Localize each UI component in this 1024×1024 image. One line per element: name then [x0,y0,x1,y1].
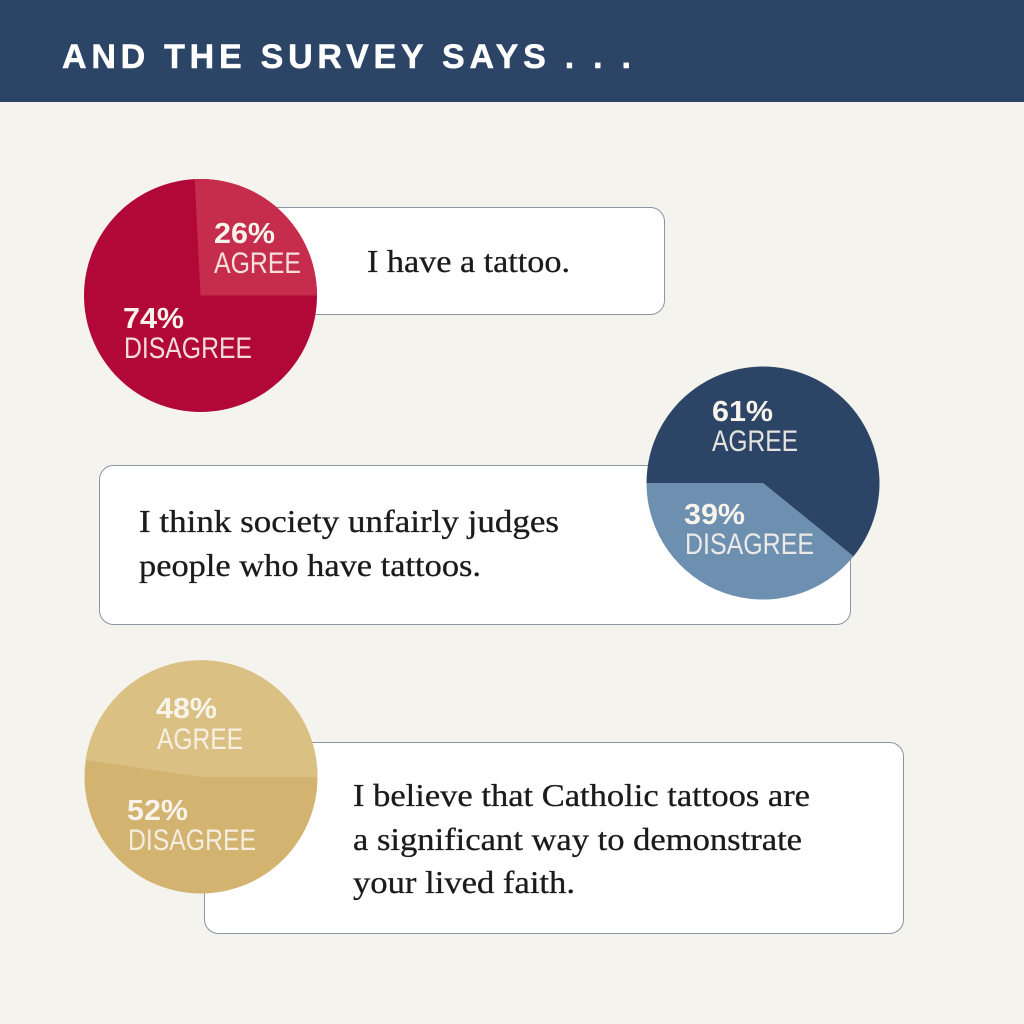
label: 39% disagree [684,499,814,561]
label: 48% agree [156,693,243,756]
label: 48% agree: AGREE [157,723,243,756]
header banner [0,0,1024,102]
label: 26% agree: 26% [214,218,275,250]
statement text: people who have tattoos. [139,547,481,583]
statement text: I think society unfairly judges [139,503,559,539]
label: 74% disagree [123,303,252,365]
title: AND THE SURVEY SAYS . . . [62,38,631,76]
statement text: I believe that Catholic tattoos are [353,777,810,813]
label: 26% agree [214,218,301,280]
pie chart: 26% agree, 74% disagree [84,179,317,412]
panel: lived faith statement [204,742,904,934]
statement text: I have a tattoo. [367,243,570,279]
label: 52% disagree [127,795,256,857]
label: 61% agree: AGREE [712,425,798,458]
label: 48% agree: 48% [156,693,217,725]
label: 61% agree: 61% [712,396,773,428]
label: 39% disagree: DISAGREE [685,528,814,561]
label: 52% disagree: DISAGREE [128,824,256,857]
panel: tattoo statement [200,208,664,314]
statement text [139,503,559,583]
pie chart: 48% agree, 52% disagree [84,660,318,894]
statement text: your lived faith. [353,864,575,900]
label: 39% disagree: 39% [684,499,745,531]
label: 52% disagree: 52% [127,795,188,827]
label: 74% disagree: DISAGREE [124,332,252,365]
statement text: a significant way to demonstrate [353,821,802,857]
label: 26% agree: AGREE [214,247,301,280]
panel: unfair judgment statement [100,466,850,624]
pie chart: 61% agree, 39% disagree [646,367,879,600]
label: 74% disagree: 74% [123,303,184,335]
label: 61% agree [712,396,798,458]
statement text [353,777,810,900]
